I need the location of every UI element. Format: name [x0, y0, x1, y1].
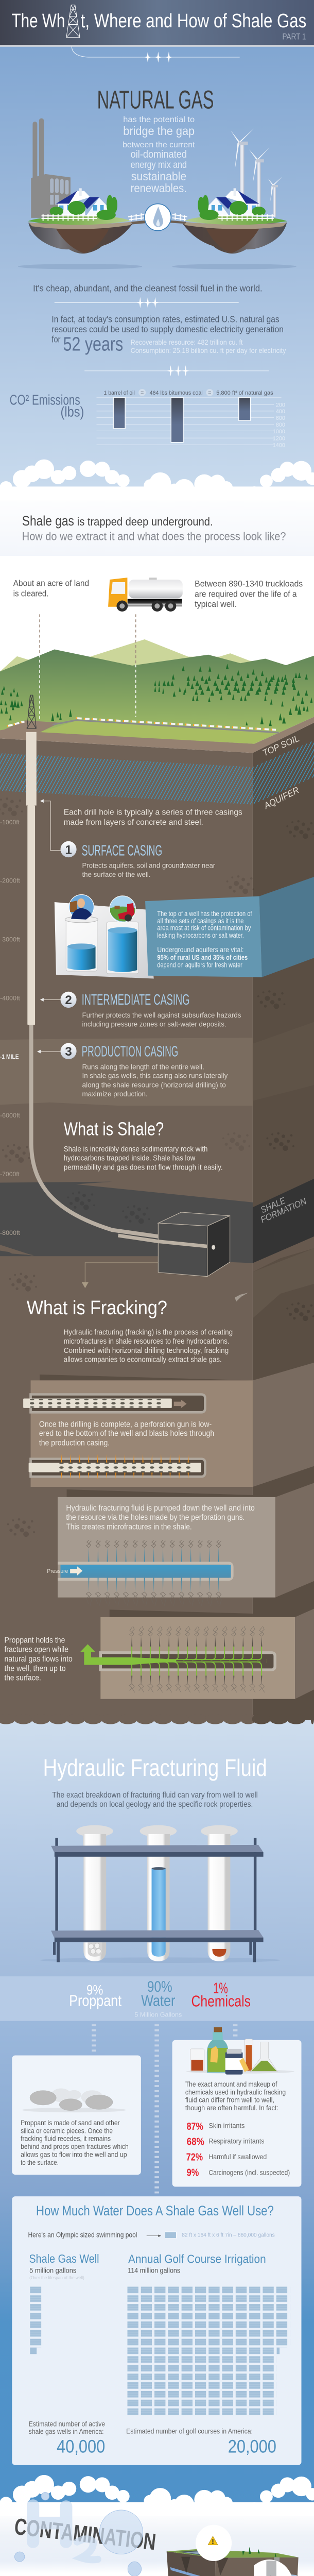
surface casing step: 1	[65, 843, 72, 857]
chart: CO2 bars: 1000	[273, 429, 285, 435]
text: bridge the gap: bridge the gap	[123, 124, 195, 138]
icon: tanker truck	[108, 578, 183, 612]
chart: CO2 bars: 1 barrel of oil	[104, 390, 135, 396]
depth scale: -7000ft	[0, 1171, 20, 1178]
column: shale gas well: Estimated number of active	[29, 2420, 105, 2428]
intermediate casing step: 2	[65, 993, 72, 1007]
island shadows	[18, 264, 296, 269]
icon: tractor in beaker	[107, 896, 138, 974]
text: cheap abundant: It's cheap, abundant, and the cleanest fossil fuel in the world.	[33, 283, 263, 294]
card: chemicals: though are often harmful. In fact:	[185, 2104, 278, 2112]
surface casing step: the surface of the well.	[82, 870, 151, 878]
diagram: pressure pipe: Pressure	[47, 1568, 68, 1574]
callout: aquifers are vital: area most at risk of contamination by	[157, 924, 251, 932]
text: acre of land: About an acre of land	[13, 579, 89, 588]
text: 52 years	[51, 314, 286, 355]
labels: proppant water chemicals: Chemicals	[191, 1992, 251, 2010]
heading: shale gas	[22, 513, 286, 543]
text: what is shale: permeability and gas does not flow through it easily.	[64, 1163, 223, 1172]
text: fracking definition	[64, 1329, 233, 1364]
text: 52 years: for	[51, 334, 61, 344]
text: 52 years: Recoverable resource: 482 trillion cu. ft	[131, 338, 243, 346]
chart: CO2 bars: 800	[276, 422, 285, 428]
heading: shale gas: is trapped deep underground.	[77, 515, 213, 528]
rack back posts	[55, 1838, 256, 1933]
panel: perforation: the production casing.	[39, 1439, 110, 1448]
well column	[167, 2547, 299, 2576]
callout: aquifers are vital: leaking hydrocarbons or salt water.	[157, 931, 244, 939]
text: acre of land	[13, 579, 89, 598]
icon: rocks	[22, 2088, 126, 2112]
stats: harmful chemicals: Harmful if swallowed	[208, 2153, 267, 2161]
text: proppant explanation	[5, 1636, 73, 1683]
dashed connectors	[94, 2024, 235, 2194]
intermediate casing step	[40, 992, 241, 1028]
chart: CO2 bars: 600	[276, 415, 285, 421]
labels: proppant water chemicals: 9%	[86, 1982, 103, 1998]
shale layer	[0, 1182, 253, 1263]
icon: drilling rig	[27, 695, 36, 728]
section: casings and shale	[31, 992, 308, 1246]
aquifer hatch	[0, 741, 314, 805]
legend: olympic pool: 82 ft x 164 ft x 6 ft 7in – 660,000 gallons	[182, 2232, 275, 2239]
column: golf course	[126, 2252, 290, 2457]
production casing step: along the shale resource (horizontal drilling) to	[82, 1080, 226, 1089]
text: proppant explanation: Proppant holds the	[5, 1636, 65, 1645]
text: three casings	[64, 808, 242, 827]
right face labels: AQUIFER	[261, 785, 301, 811]
labels: proppant water chemicals: 90%	[147, 1978, 172, 1995]
left island	[28, 188, 133, 253]
column: shale gas well: shale gas wells in America:	[29, 2427, 104, 2435]
column: golf course: 114 million gallons	[128, 2266, 180, 2275]
text: 52 years: Consumption: 25.18 billion cu. ft per day for electricity	[131, 346, 286, 354]
well casing pipe	[26, 732, 37, 1025]
column: golf course: 20,000	[228, 2436, 276, 2457]
heading: contamination with H2O: CONTAMINATION	[13, 2513, 158, 2555]
landscape	[0, 614, 314, 1236]
arrow to fracking	[82, 1263, 158, 1288]
column: golf course: Estimated number of golf courses in America:	[126, 2427, 253, 2435]
chart: CO2 bars: 400	[276, 409, 285, 415]
chart: CO2 bars: 1400	[273, 443, 285, 448]
card: chemicals: fluid can differ from well to well,	[185, 2096, 274, 2105]
card: proppant: allows gas to flow into the well and up	[21, 2151, 127, 2159]
intermediate casing step: including pressure zones or salt-water deposits.	[82, 1020, 226, 1028]
heading: natural gas: NATURAL GAS	[97, 86, 214, 114]
legend: olympic pool	[28, 2231, 275, 2239]
card: proppant: to the surface.	[21, 2159, 59, 2167]
card: proppant: Proppant is made of sand and other	[21, 2119, 120, 2127]
text: what is shale: hydrocarbons trapped inside. Shale has low	[64, 1155, 196, 1163]
underground base block	[0, 723, 314, 1720]
column: shale gas well: 5 million gallons	[29, 2266, 76, 2275]
text: fracking definition: Combined with horizontal drilling technology, fracking	[64, 1347, 229, 1355]
production casing step: 3	[65, 1045, 72, 1059]
title: The Wh	[12, 10, 65, 32]
stats: harmful chemicals: Carcinogens (incl. suspected)	[208, 2168, 290, 2176]
surface casing step	[40, 799, 216, 878]
card: proppant	[12, 2056, 141, 2175]
card: chemicals: The exact amount and makeup of	[185, 2080, 277, 2089]
text: three casings: Each drill hole is typically a series of three casings	[64, 808, 242, 817]
section: fracturing diagrams	[5, 1530, 314, 1809]
production casing step: Runs along the length of the entire well.	[82, 1063, 204, 1071]
stats: harmful chemicals	[186, 2121, 290, 2179]
icon: power plant	[31, 118, 71, 218]
divider with stars	[72, 46, 240, 63]
dashed measure lines	[40, 614, 136, 719]
text: breakdown: and depends on local geology and the specific rock properties.	[57, 1800, 253, 1809]
background: fracturing fluid blue gradient	[0, 1716, 314, 2504]
labels: proppant water chemicals: Proppant	[69, 1992, 121, 2009]
panel: perforation	[23, 1363, 314, 1487]
text: 52 years: 52 years	[63, 333, 123, 355]
chart: CO2 bars: 1200	[273, 436, 285, 442]
text: proppant explanation: natural gas flows into	[5, 1655, 73, 1664]
road with truck convoy	[7, 718, 279, 733]
mountains	[0, 639, 314, 753]
heading: CO2 emissions: (lbs)	[60, 404, 84, 419]
chart: CO2 bars: =	[141, 390, 144, 396]
stats: harmful chemicals: 87%	[187, 2121, 203, 2132]
depth scale: -4000ft	[0, 995, 20, 1002]
panel: proppant	[80, 1608, 314, 1699]
tube: chemicals	[201, 1825, 238, 1961]
chart: CO2 bars	[97, 389, 285, 448]
text: three casings: made from layers of concrete and steel.	[64, 818, 203, 827]
column: shale gas well: Shale Gas Well	[29, 2252, 99, 2265]
underground layers	[0, 990, 314, 1263]
depth scale	[0, 819, 20, 1236]
card: proppant: fracking fluid recedes, it remains	[21, 2135, 111, 2143]
labels: proppant water chemicals: 5 Million Gallons	[134, 2011, 182, 2019]
scalloped bottom edge	[0, 1714, 314, 1724]
text: bridge the gap: energy mix and	[131, 160, 187, 171]
diagram: pressure pipe	[47, 1530, 232, 1607]
stats: harmful chemicals: Respiratory irritants	[208, 2137, 265, 2145]
surface casing step: SURFACE CASING	[82, 843, 162, 859]
rack plates and legs	[51, 1845, 264, 1962]
production casing step: In shale gas wells, this casing also runs laterally	[82, 1072, 228, 1080]
production casing step	[37, 1043, 228, 1098]
depth scale: -6000ft	[0, 1112, 20, 1119]
chart: CO2 bars: 464 lbs bitumous coal	[150, 390, 203, 396]
card: chemicals	[172, 2027, 301, 2187]
heading: contamination with H2O	[13, 2492, 158, 2576]
panel: pressure fracturing: This creates microfractures in the shale.	[66, 1523, 192, 1532]
stats: harmful chemicals: 68%	[187, 2137, 204, 2148]
clouds	[0, 2475, 314, 2516]
warning bubble: surface pit	[196, 2525, 232, 2561]
forest trees	[0, 664, 312, 726]
labels: proppant water chemicals: 1%	[213, 1980, 228, 1997]
depth scale: -2000ft	[0, 877, 20, 884]
right face labels	[261, 733, 301, 811]
shale sample cube	[158, 1212, 230, 1277]
right island	[183, 188, 287, 253]
section: what is fracking	[7, 1212, 314, 1598]
text: proppant explanation: fractures open while	[5, 1646, 68, 1654]
heading: what is fracking: What is Fracking?	[27, 1297, 167, 1319]
icon: businessman in beaker	[65, 894, 98, 971]
panel: pressure fracturing: Hydraulic fracturing fluid is pumped down the well and into	[66, 1504, 255, 1513]
callout: aquifers are vital	[145, 877, 314, 977]
white background: contamination and below	[0, 2508, 314, 2576]
labels: proppant water chemicals: Water	[141, 1992, 175, 2009]
title banner	[0, 0, 314, 47]
depth scale: -3000ft	[0, 936, 20, 943]
icon: derrick in title	[66, 5, 80, 38]
section: natural gas bridge	[18, 46, 296, 308]
depth scale: -1000ft	[0, 819, 20, 826]
tube: water	[140, 1825, 177, 1961]
card: proppant: silica or ceramic pieces. Once the	[21, 2127, 113, 2135]
heading: CO2 emissions	[10, 392, 84, 419]
text: bridge the gap: sustainable	[131, 170, 186, 183]
text: proppant explanation: the well, then up to	[5, 1664, 66, 1673]
column: golf course: Annual Golf Course Irrigation	[128, 2252, 266, 2265]
production casing step: PRODUCTION CASING	[82, 1044, 178, 1060]
tube: proppant	[76, 1825, 113, 1961]
background band under clouds	[0, 489, 314, 556]
section: contamination	[0, 2475, 314, 2576]
text: fracking definition: microfractures in shale resources to free hydrocarbons.	[64, 1337, 229, 1346]
card: chemicals: chemicals used in hydraulic fracking	[185, 2088, 286, 2096]
rack shadow	[40, 1957, 281, 1963]
card: how much water	[12, 2196, 301, 2465]
text: bridge the gap: renewables.	[131, 181, 187, 195]
text: bridge the gap: oil-dominated	[131, 149, 187, 160]
icon: gas flame	[145, 204, 171, 231]
text: fracking definition: Hydraulic fracturing (fracking) is the process of creating	[64, 1329, 233, 1337]
lateral pipe in cube	[118, 1235, 215, 1250]
warning bubble: casing	[254, 2560, 291, 2576]
test tube rack	[0, 1825, 314, 2194]
text: acre of land: is cleared.	[13, 589, 49, 598]
stats: harmful chemicals: Skin irritants	[208, 2122, 245, 2130]
production casing pipe	[31, 1025, 207, 1246]
icon: wind turbines	[231, 128, 282, 217]
chart: CO2 bars: 5,800 ft³ of natural gas	[216, 390, 273, 396]
part label: PART 1	[283, 32, 306, 41]
panel: perforation: Once the drilling is complete, a perforation gun is low-	[39, 1420, 212, 1429]
depth scale: -1 MILE	[0, 1053, 19, 1060]
text: breakdown: The exact breakdown of fracturing fluid can vary from well to well	[52, 1791, 258, 1800]
contamination fade band	[0, 2512, 314, 2573]
callout: aquifers are vital: all three sets of casings as it is the	[157, 917, 243, 925]
intermediate casing step: Further protects the well against subsurface hazards	[82, 1011, 241, 1019]
heading: shale gas: Shale gas	[22, 513, 74, 529]
column: shale gas well: (Over the lifespan of the well)	[29, 2275, 84, 2280]
text: truckloads: typical well.	[195, 599, 237, 609]
stats: harmful chemicals: 72%	[186, 2152, 203, 2163]
divider	[84, 365, 269, 376]
surface casing step: Protects aquifers, soil and groundwater near	[82, 861, 216, 869]
text: what is shale: Shale is incredibly dense sedimentary rock with	[64, 1145, 207, 1154]
callout: aquifers are vital: The top of a well has the protection of	[157, 910, 252, 918]
shale formation label: SHALE	[259, 1195, 287, 1215]
heading: what is shale: What is Shale?	[64, 1118, 164, 1140]
card: proppant: behind and props open fractures which	[21, 2143, 129, 2151]
intermediate casing step: INTERMEDIATE CASING	[82, 992, 189, 1008]
column: shale gas well: 40,000	[57, 2436, 105, 2457]
heading: shale gas: How do we extract it and what does the process look like?	[22, 530, 286, 543]
text: what is shale	[64, 1145, 223, 1172]
right face labels: TOP SOIL	[261, 733, 301, 758]
icon: chemical bottles	[186, 2027, 294, 2075]
text: fracking definition: allows companies to economically extract shale gas.	[64, 1355, 222, 1364]
bridge	[128, 213, 187, 224]
clouds	[0, 460, 314, 500]
column: shale gas well	[29, 2252, 105, 2457]
callout: aquifers are vital: 95% of rural US and 35% of cities	[157, 954, 248, 961]
page background: sky	[0, 0, 314, 487]
icon: fish fossil	[235, 1293, 248, 1301]
panel: perforation: ered to the bottom of the well and blasts holes through	[39, 1429, 214, 1438]
depth scale: -8000ft	[0, 1229, 20, 1236]
text: breakdown	[52, 1791, 258, 1809]
callout: aquifers are vital: depend on aquifers for fresh water	[157, 961, 242, 969]
right face strata	[253, 1236, 314, 1318]
heading: CO2 emissions: CO² Emissions	[10, 392, 80, 408]
chart: CO2 bars: 200	[276, 402, 285, 408]
text: bridge the gap	[123, 115, 195, 195]
divider	[55, 297, 239, 308]
legend: olympic pool: Here's an Olympic sized swimming pool	[28, 2231, 137, 2239]
text: bridge the gap: between the current	[123, 140, 195, 149]
panel: pressure fracturing	[58, 1483, 314, 1598]
shale formation label: FORMATION	[259, 1196, 308, 1225]
text: truckloads: Between 890-1340 truckloads	[195, 579, 303, 588]
stats: harmful chemicals: 9%	[187, 2167, 199, 2179]
section: consumption and CO2	[0, 314, 314, 612]
text: 52 years: resources could be used to supply domestic electricity generation	[51, 324, 284, 334]
labels: proppant water chemicals	[69, 1978, 251, 2019]
text: truckloads	[195, 579, 303, 609]
production casing step: maximize production.	[82, 1090, 148, 1098]
chart: CO2 bars: =	[208, 390, 211, 396]
text: proppant explanation: the surface.	[5, 1674, 41, 1683]
panel: pressure fracturing: the resource via the holes made by the perforation guns.	[66, 1513, 245, 1522]
text: 52 years: In fact, at today's consumption rates, estimated U.S. natural gas	[51, 314, 280, 325]
panel: aquifer beakers	[55, 894, 154, 978]
callout: aquifers are vital: Underground aquifers are vital:	[157, 946, 243, 954]
heading: hydraulic fracturing fluid: Hydraulic Fracturing Fluid	[43, 1754, 267, 1781]
text: bridge the gap: has the potential to	[123, 115, 195, 124]
text: truckloads: are required over the life of a	[195, 589, 297, 599]
